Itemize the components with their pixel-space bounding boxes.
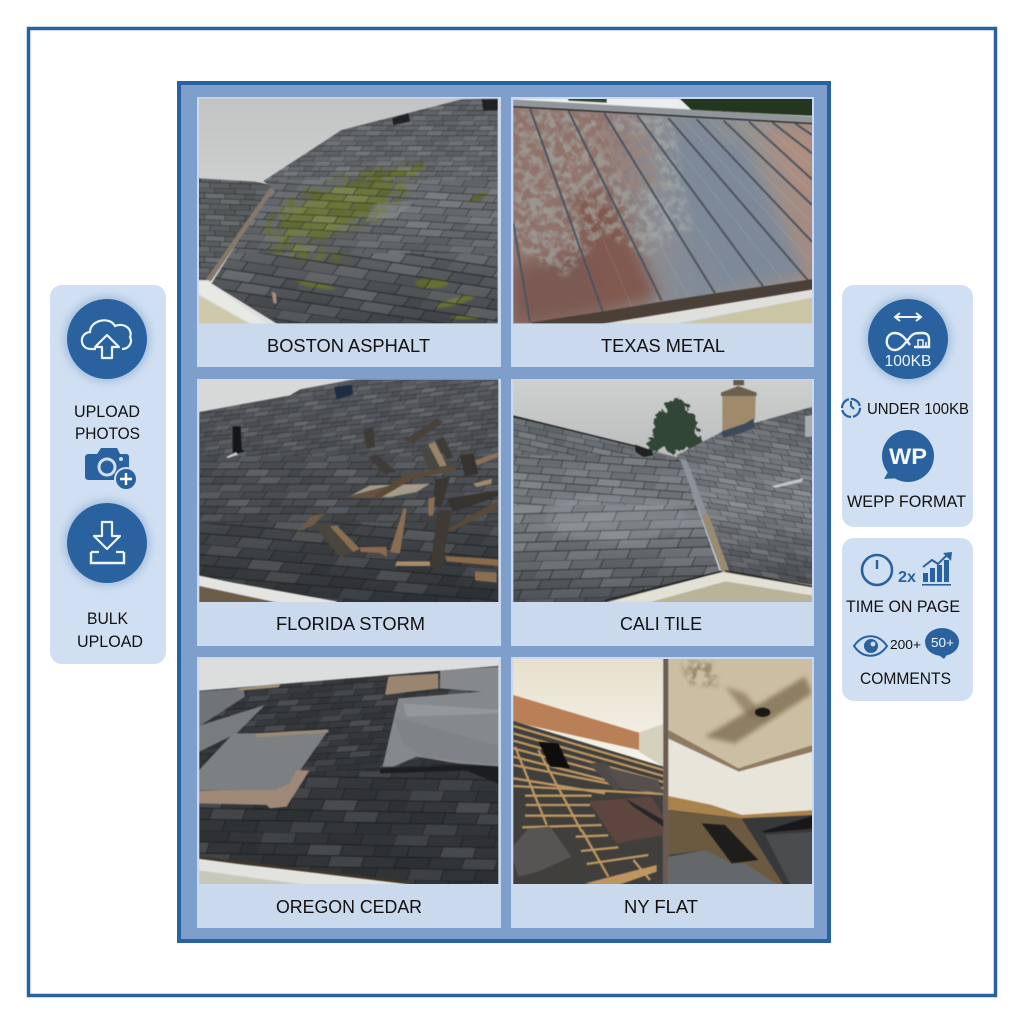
- photo: mossy asphalt roof: [195, 95, 502, 327]
- tree: [646, 398, 701, 453]
- card: NY flat: [510, 656, 815, 928]
- card: Texas metal: [510, 96, 815, 367]
- icon: small gauge: [842, 399, 860, 417]
- stat: 2x: 2x: [898, 569, 916, 586]
- label: bulk upload: UPLOAD: [77, 632, 143, 651]
- photo: roof with tarps: [196, 655, 502, 887]
- panel: engagement metrics: [842, 538, 973, 701]
- icon: camera plus: [85, 448, 137, 490]
- caption: Florida Storm: FLORIDA STORM: [276, 613, 425, 634]
- card: Florida storm: [196, 376, 502, 646]
- label: bulk upload: [77, 609, 143, 651]
- icon: growth chart: [922, 552, 952, 586]
- caption: Cali Tile: CALI TILE: [620, 613, 702, 634]
- label: upload photos: UPLOAD: [74, 402, 140, 421]
- card: Oregon cedar: [196, 655, 502, 928]
- icon: 50+ speech bubble: [925, 628, 959, 659]
- chimney: [721, 380, 757, 432]
- panel: upload actions: [50, 285, 166, 664]
- label: under 100KB: UNDER 100KB: [867, 401, 969, 418]
- label: WEPP format: WEPP FORMAT: [847, 492, 966, 511]
- label: upload photos: [74, 402, 140, 443]
- photo: grey shingle valley with chimney: [510, 376, 815, 605]
- card: Boston asphalt: [195, 95, 502, 367]
- icon: WP speech bubble: [882, 430, 934, 482]
- stat: 200+ views: 200+: [890, 638, 921, 652]
- icon: clock: [862, 555, 892, 585]
- label: upload photos: PHOTOS: [75, 424, 140, 443]
- ceiling and walls: [668, 656, 815, 815]
- label: time on page: TIME ON PAGE: [846, 597, 960, 616]
- wood debris: [298, 419, 498, 583]
- photo: interior damage split view: [510, 656, 815, 887]
- photo: storm damaged shingles: [196, 376, 502, 605]
- label: comments: COMMENTS: [860, 670, 951, 688]
- icon: 100KB compression badge: 100KB: [884, 353, 932, 370]
- caption: Boston Asphalt: BOSTON ASPHALT: [267, 335, 430, 356]
- icon: 50+ speech bubble: 50+: [931, 636, 954, 650]
- panel: file size and format: [842, 285, 973, 527]
- label: bulk upload: BULK: [87, 609, 129, 628]
- tarps: [196, 667, 502, 808]
- icon: eye: [854, 636, 887, 656]
- icon: 100KB compression badge: [865, 296, 951, 382]
- photo: rusted metal roof: [510, 96, 815, 327]
- caption: Oregon Cedar: OREGON CEDAR: [276, 896, 422, 917]
- panel: roof photo gallery: [179, 83, 829, 941]
- icon: WP speech bubble: WP: [889, 444, 927, 469]
- icon: cloud upload: [64, 296, 150, 382]
- caption: Texas Metal: TEXAS METAL: [601, 335, 725, 356]
- icon: bulk download tray: [64, 500, 150, 586]
- card: Cali tile: [510, 376, 815, 646]
- caption: NY Flat: NY FLAT: [624, 896, 698, 917]
